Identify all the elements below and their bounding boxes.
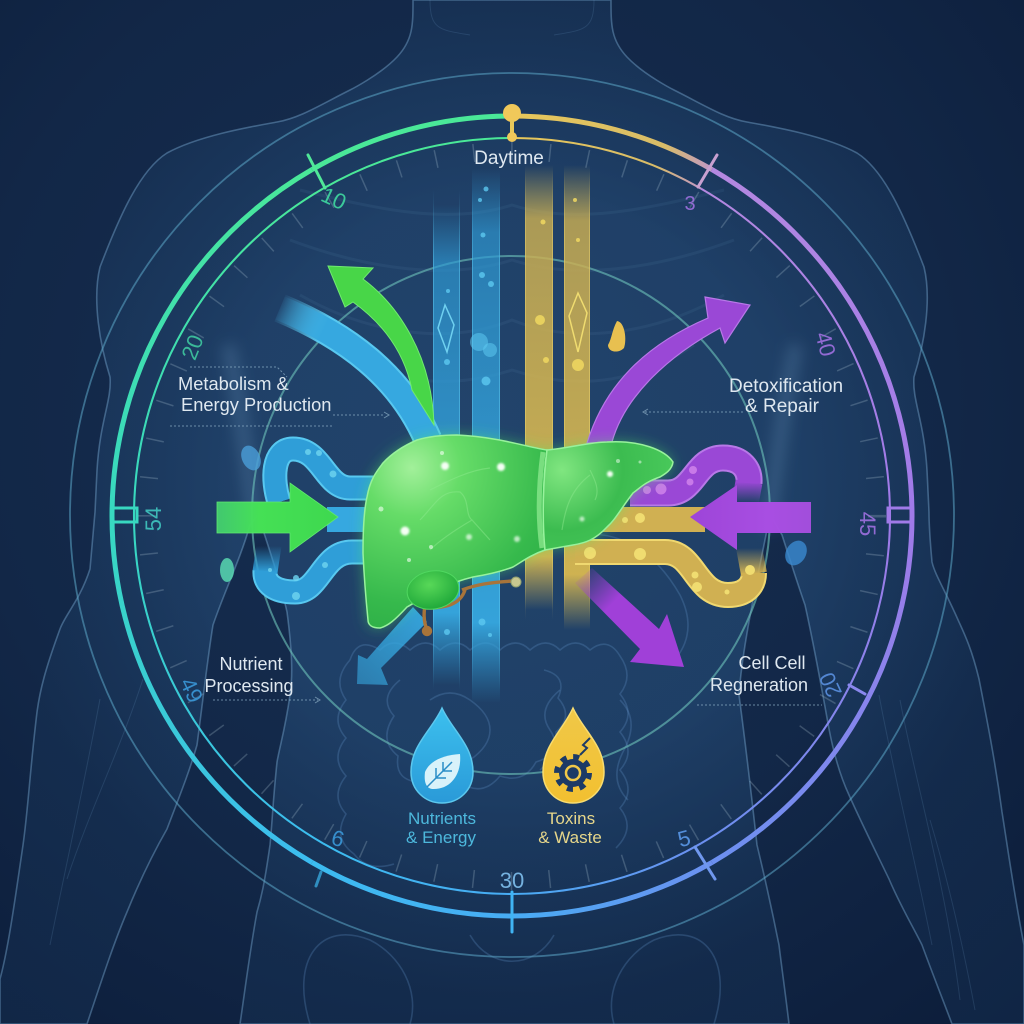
ring: inner teal circle (252, 256, 770, 774)
ring: main circadian clock (112, 116, 912, 916)
gallbladder (404, 567, 462, 613)
curved blue arrow upper-left (280, 308, 428, 440)
blue S tube upper-left (275, 449, 376, 502)
liver sparkles (378, 451, 642, 562)
faint intestines (304, 534, 720, 1024)
blue S tube lower-left (265, 545, 372, 592)
label: cell regeneration: Cell Cell (738, 653, 806, 673)
ribs (290, 190, 734, 381)
clock numbers: 3 (684, 193, 696, 215)
vessel edge highlights (433, 190, 500, 690)
purple arrow pointing left (690, 485, 811, 550)
leaf (425, 754, 460, 789)
label: nutrient processing: Processing (204, 676, 294, 696)
label: nutrients and energy: Nutrients (408, 809, 476, 828)
clock numbers: 40 (810, 329, 841, 359)
label: metabolism: Metabolism & (178, 373, 289, 394)
label: Daytime: Daytime (474, 148, 544, 169)
clock numbers: 30 (500, 868, 524, 893)
label: detoxification: Detoxification (729, 376, 843, 397)
liver glow (363, 435, 673, 628)
yellow S tube right (575, 547, 754, 595)
vessel edge highlights (525, 170, 590, 620)
clock numbers (141, 182, 880, 893)
ring: thin inner coloured line (134, 138, 890, 894)
vessel particles yellow (535, 198, 587, 371)
liver veins (420, 468, 597, 550)
dotted leader lines (170, 367, 822, 705)
floating blobs (220, 321, 811, 582)
yellow vertical vessels (525, 165, 590, 630)
left lobe (363, 435, 547, 628)
label: nutrient processing: Nutrient (219, 654, 283, 674)
forearm lines (50, 679, 975, 1010)
clock numbers: 6 (329, 825, 347, 852)
armpit glow (228, 345, 796, 530)
label: toxins and waste: Toxins (547, 809, 595, 828)
curved green arrow upper-left (328, 266, 434, 425)
purple S tube right (630, 458, 749, 504)
clock numbers: 20 (814, 668, 847, 701)
vessel particles blue (438, 186, 497, 637)
lobe divider (539, 452, 543, 548)
label: detoxification: & Repair (745, 396, 820, 417)
tube particles left (268, 449, 336, 600)
green arrow pointing right (217, 483, 338, 552)
tube particles right (584, 466, 755, 594)
clock numbers: 20 (176, 331, 209, 363)
ring tick marks (113, 155, 911, 932)
blue downward arrow (357, 607, 427, 685)
blue band centre-left (327, 507, 372, 532)
ring: outer faint guide (70, 73, 954, 957)
label: nutrients and energy: & Energy (406, 828, 476, 847)
clock numbers: 54 (141, 507, 166, 531)
label: toxins and waste: & Waste (538, 828, 602, 847)
liver (363, 435, 673, 628)
clavicle lines (430, 0, 594, 35)
marker: noon sun (503, 104, 521, 142)
label: metabolism: Energy Production (181, 394, 331, 415)
icon: toxins drop (543, 708, 604, 803)
curved purple arrow upper-right (587, 297, 750, 443)
yellow band centre-right (600, 507, 705, 532)
purple arrow lower-right (575, 568, 684, 667)
icon: nutrients drop (411, 708, 473, 803)
clock numbers: 45 (855, 512, 880, 536)
ring: minute ticks (147, 151, 877, 881)
gear (559, 759, 587, 787)
bile duct (424, 577, 521, 634)
clock numbers: 49 (175, 674, 208, 707)
clock numbers: 5 (675, 825, 693, 852)
right lobe (543, 442, 673, 550)
label: cell regeneration: Regneration (710, 675, 808, 695)
blue vertical vessels (433, 168, 500, 703)
clock numbers: 10 (317, 182, 350, 215)
